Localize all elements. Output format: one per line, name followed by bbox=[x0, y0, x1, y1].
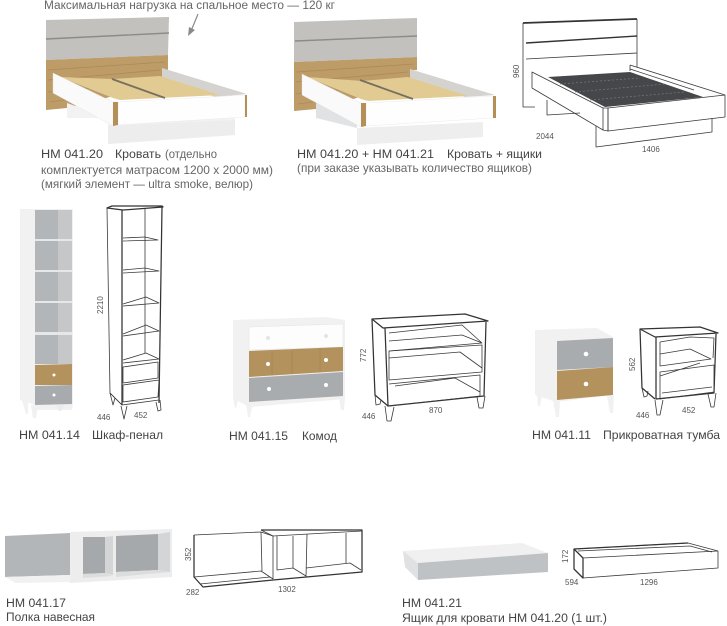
dimensions: nightstand: 562 bbox=[628, 357, 637, 371]
caption: drawer bbox=[402, 596, 607, 625]
panel: tall cabinet photo bbox=[20, 209, 73, 418]
dimensions: drawer: 172 bbox=[561, 549, 570, 563]
caption: chest: Комод bbox=[302, 429, 337, 443]
caption: bed: (отдельно bbox=[165, 148, 217, 161]
panel: bed photo bbox=[46, 17, 247, 144]
dimensions: wall shelf bbox=[184, 547, 296, 597]
caption: drawer: Ящик для кровати НМ 041.20 (1 шт.) bbox=[402, 611, 607, 625]
caption: nightstand: Прикроватная тумба bbox=[603, 428, 720, 442]
drawing: tall cabinet bbox=[107, 206, 163, 419]
caption: tall cabinet: НМ 041.14 bbox=[19, 428, 80, 442]
caption: chest: НМ 041.15 bbox=[229, 429, 288, 443]
dimensions: tall cabinet: 446 bbox=[97, 413, 111, 422]
drawing: nightstand bbox=[640, 327, 718, 415]
dimensions: drawer bbox=[561, 549, 658, 587]
caption: drawer: НМ 041.21 bbox=[402, 596, 462, 610]
load note: Максимальная нагрузка на спальное место — 120 кг bbox=[44, 0, 335, 12]
caption: bed with drawers: НМ 041.20 + НМ 041.21 bbox=[297, 147, 434, 161]
dimensions: bed: 960 bbox=[512, 64, 521, 78]
dimensions: wall shelf: 352 bbox=[184, 547, 193, 561]
dimensions: chest: 870 bbox=[429, 406, 443, 415]
drawing: chest bbox=[372, 314, 488, 421]
panel: drawer photo bbox=[403, 543, 548, 580]
dimensions: tall cabinet: 452 bbox=[134, 411, 148, 420]
dimensions: bed: 2044 bbox=[536, 132, 554, 141]
dimensions: chest bbox=[359, 348, 443, 421]
drawing: wall shelf bbox=[194, 530, 362, 587]
dimensions: chest: 446 bbox=[362, 412, 376, 421]
caption: bed with drawers: (при заказе указывать количество ящиков) bbox=[297, 162, 532, 175]
dimensions: nightstand: 446 bbox=[636, 411, 650, 420]
dimensions: tall cabinet: 2210 bbox=[96, 296, 105, 314]
caption: wall shelf bbox=[6, 596, 95, 624]
caption: nightstand: НМ 041.11 bbox=[532, 428, 591, 442]
caption: nightstand bbox=[532, 428, 720, 442]
dimensions: wall shelf: 282 bbox=[186, 588, 200, 597]
caption: tall cabinet: Шкаф-пенал bbox=[92, 428, 163, 442]
caption: bed: Кровать bbox=[115, 147, 161, 161]
caption: bed: комплектуется матрасом 1200 х 2000 мм) bbox=[41, 164, 273, 177]
panel: bed with drawers photo bbox=[294, 18, 496, 145]
drawing: drawer bbox=[574, 543, 718, 578]
panel: chest photo bbox=[233, 317, 345, 417]
drawing: bed bbox=[523, 19, 725, 147]
caption: chest bbox=[229, 429, 337, 443]
dimensions: drawer: 594 bbox=[565, 578, 579, 587]
caption: tall cabinet bbox=[19, 428, 163, 442]
dimensions: tall cabinet bbox=[96, 296, 148, 422]
arrow: load pointer bbox=[188, 14, 198, 36]
dimensions: drawer: 1296 bbox=[640, 578, 658, 587]
dimensions: wall shelf: 1302 bbox=[278, 585, 296, 594]
dimensions: chest: 772 bbox=[359, 348, 368, 362]
caption: bed: НМ 041.20 bbox=[41, 147, 103, 161]
caption: bed bbox=[41, 147, 273, 191]
dimensions: nightstand bbox=[628, 357, 696, 420]
caption: wall shelf: НМ 041.17 bbox=[6, 596, 66, 610]
dimensions: nightstand: 452 bbox=[682, 406, 696, 415]
caption: bed with drawers bbox=[297, 147, 542, 175]
dimensions: bed bbox=[512, 64, 660, 154]
caption: bed with drawers: Кровать + ящики bbox=[447, 147, 542, 161]
caption: wall shelf: Полка навесная bbox=[6, 610, 95, 624]
caption: bed: (мягкий элемент — ultra smoke, велюр) bbox=[41, 178, 253, 191]
panel: wall shelf photo bbox=[5, 529, 172, 583]
dimensions: bed: 1406 bbox=[642, 145, 660, 154]
panel: nightstand photo bbox=[535, 328, 614, 417]
